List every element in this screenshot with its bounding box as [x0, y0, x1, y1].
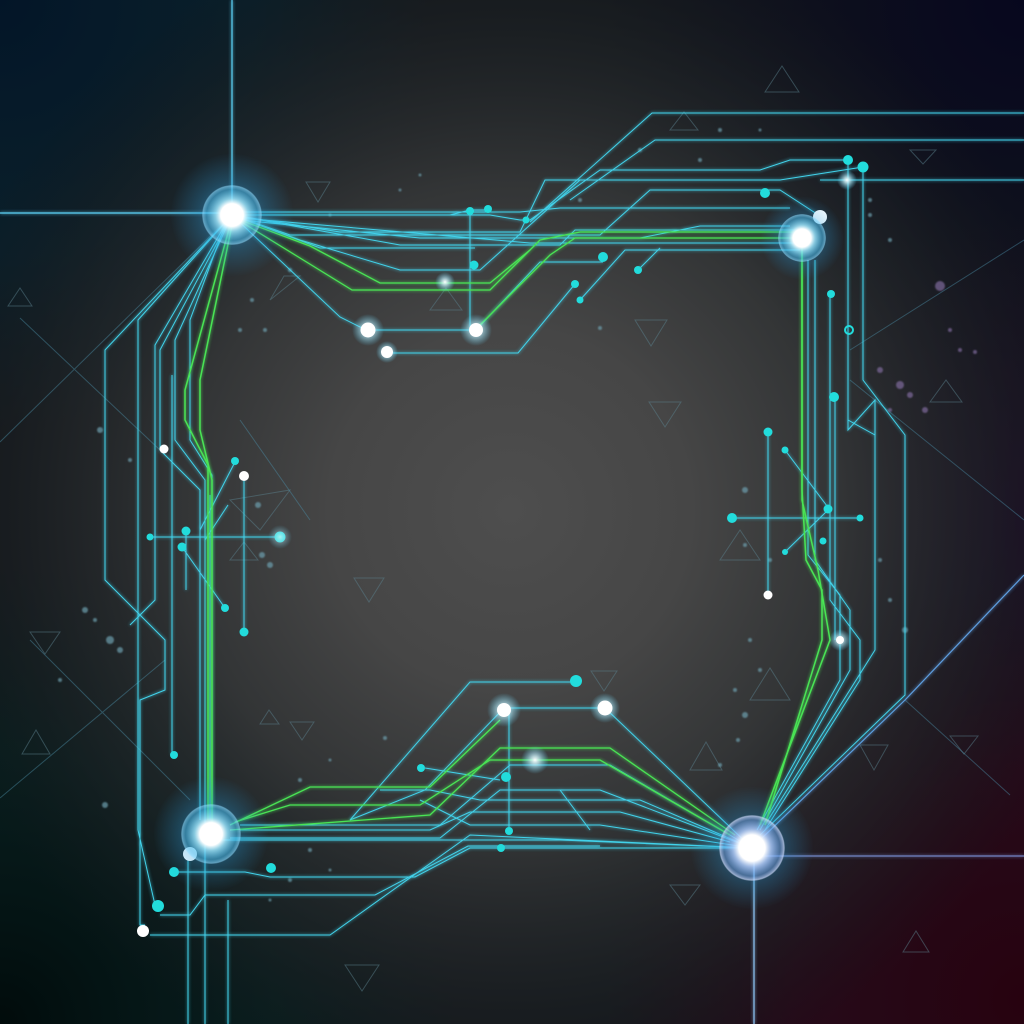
- traces: bottom edge, green: [230, 720, 735, 835]
- hub: top left: [170, 153, 294, 277]
- hub: bottom left: [153, 776, 269, 892]
- traces: right edge, cyan: [732, 160, 905, 835]
- traces: top edge, green: [235, 218, 802, 325]
- node dots: cyan: [146, 155, 868, 912]
- faint background diagonal lines: [0, 215, 1024, 800]
- traces: left edge, green: [185, 218, 232, 825]
- traces: top edge, cyan: [232, 113, 1024, 353]
- traces: bottom edge, cyan: [150, 682, 752, 1024]
- traces: left edge, cyan: [105, 215, 280, 925]
- hub: top right: [760, 196, 844, 280]
- hub: bottom right: [690, 786, 814, 910]
- traces: right edge, green: [760, 245, 830, 825]
- particle dots: [58, 128, 908, 902]
- glowing white nodes: [137, 170, 857, 937]
